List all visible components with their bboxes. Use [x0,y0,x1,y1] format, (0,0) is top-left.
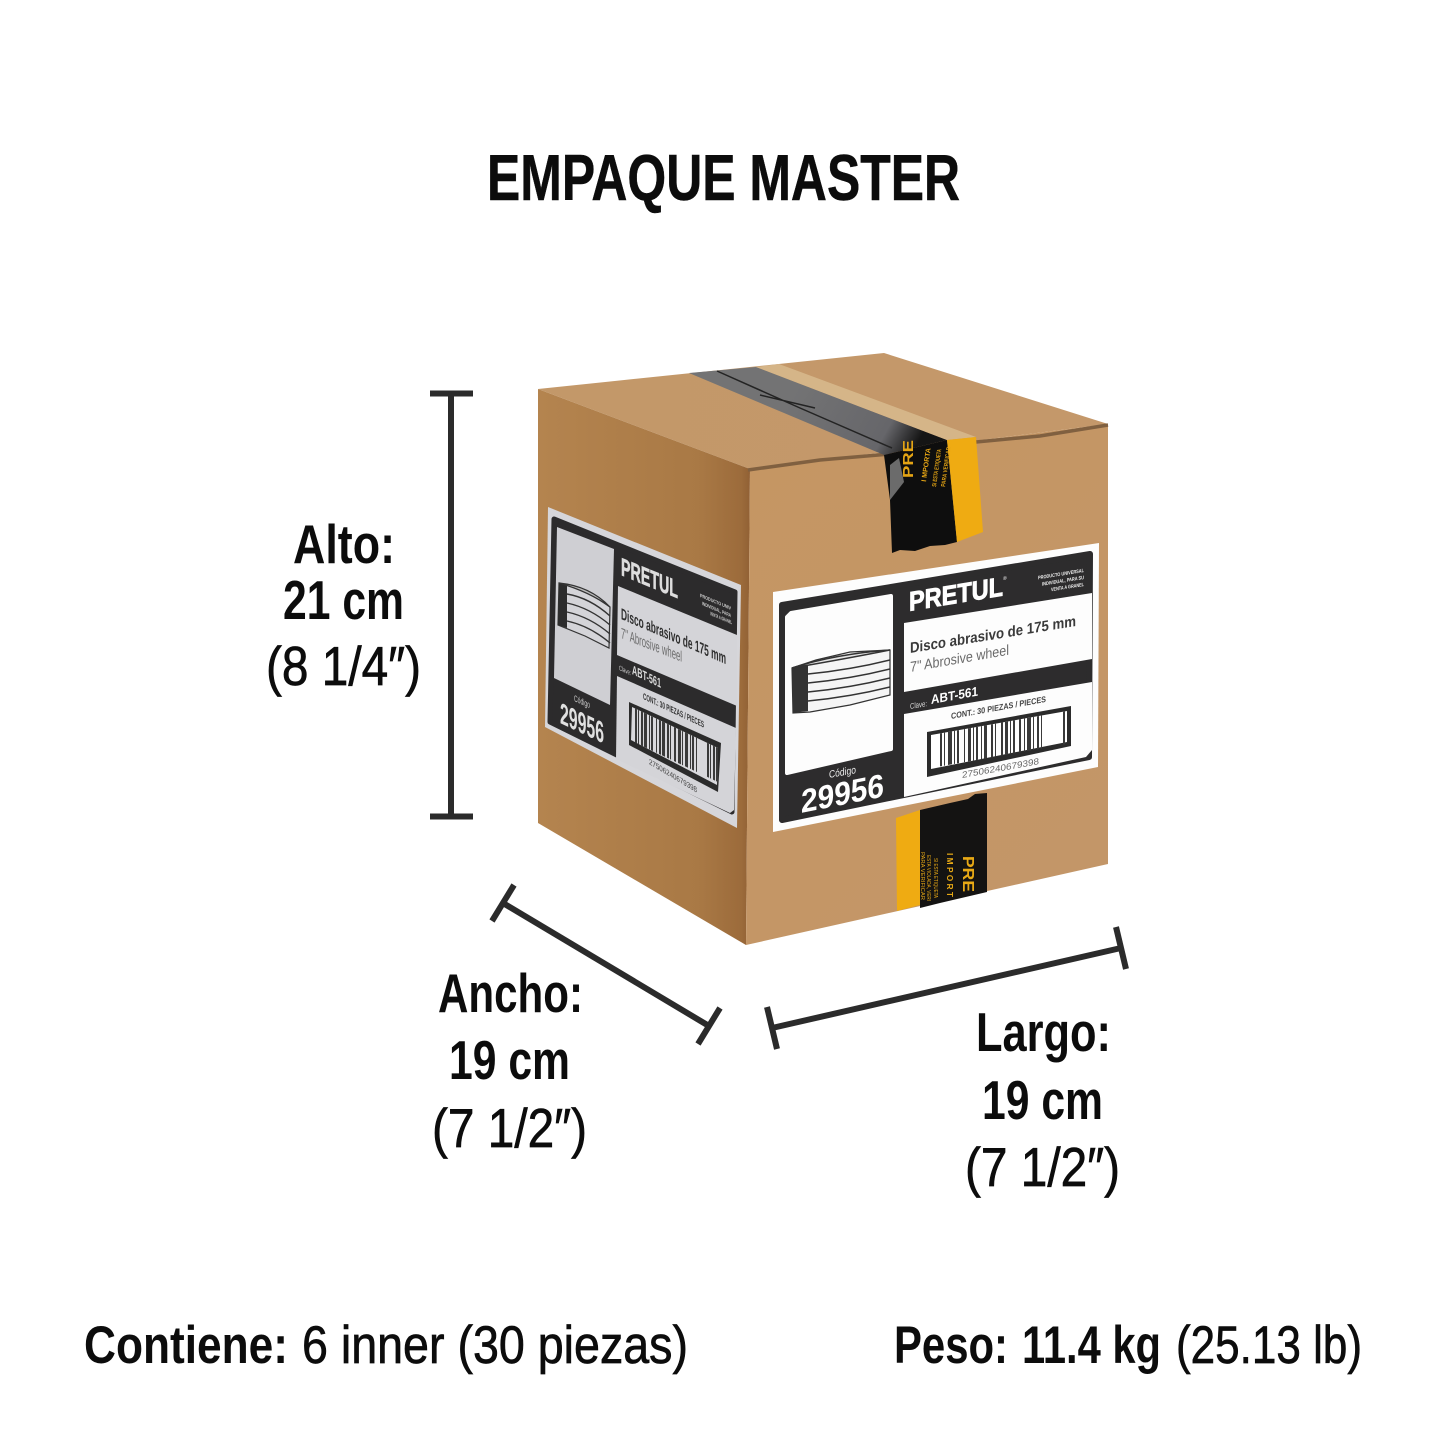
length label: (7 1/2″) [965,1136,1120,1198]
height label: 21 cm [283,569,404,631]
side barcode [629,702,721,792]
side name panel [617,586,737,706]
height label [266,513,421,697]
side product label: 7" Abrosive wheel [621,625,682,666]
side small note [700,593,732,626]
side product label [545,507,741,828]
contents note: 6 inner (30 piezas) [302,1316,688,1375]
front product label: 29956 [801,768,884,821]
packing tape on bottom [896,793,987,911]
side product label: ABT-561 [632,663,661,691]
side small note: INDIVIDUAL, PARA [702,601,731,619]
width dimension line [492,885,720,1044]
width label: 19 cm [449,1029,570,1091]
packing tape on top [689,364,983,553]
packing tape on bottom: PRE [959,856,976,892]
width label [432,962,587,1159]
contents: CONT.: 30 PIEZAS / PIECES [951,694,1046,721]
front product label [773,543,1099,832]
box left face [538,389,750,945]
product name: Disco abrasivo de 175 mm [910,613,1076,657]
packing tape on bottom: PARA VERIFICAR [919,852,925,900]
tape lettering [900,440,953,487]
front product label: 27506240679398 [962,756,1039,780]
abrasive disc icon [792,650,890,713]
side product label: 27506240679398 [649,757,697,795]
packing tape on bottom: I M P O R T [945,853,954,897]
height label: Alto: [293,513,395,575]
contents note [84,1316,688,1375]
side small note: PRODUCTO UNIV [700,593,731,612]
flap seam [748,425,1108,470]
height label: (8 1/4″) [266,635,421,697]
weight note: Peso: [894,1316,1008,1375]
clave: Clave: [910,699,927,711]
weight note: (25.13 lb) [1176,1316,1362,1375]
brand: PRETUL [909,571,1003,617]
side small note: VENTA A GRANEL [710,611,732,626]
code panel [904,682,1092,797]
side clave: Clave: [619,663,631,677]
side product code: Código [574,693,590,711]
box top face [538,353,1108,469]
front product label: ABT-561 [931,684,978,707]
barcode [927,706,1071,777]
side contents: CONT.: 30 PIEZAS / PIECES [643,691,704,731]
tape lettering: SI ESTA ETIQUETA [932,448,943,487]
front product label: 7" Abrosive wheel [910,643,1009,676]
title: EMPAQUE MASTER [487,141,960,214]
height dimension line [430,393,473,817]
weight note [894,1316,1362,1375]
tape lettering: I MPORTA [921,448,933,482]
side product name: Disco abrasivo de 175 mm [621,605,726,668]
tape lettering: PARA VERIFICAR [941,446,953,487]
small note: INDIVIDUAL, PARA SU [1042,575,1084,588]
side image panel [554,527,614,705]
length dimension line [767,927,1126,1049]
packing tape on bottom: SI ESTA ETIQUETA [932,858,938,898]
side disc icon [558,583,610,648]
front product label: ® [1003,574,1007,582]
side product label: 29956 [560,695,604,750]
small note: PRODUCTO UNIVERSAL [1038,568,1084,581]
width label: Ancho: [438,962,583,1024]
product image panel [787,596,891,773]
small note [1038,568,1084,593]
tape lettering: PRE [900,440,917,478]
weight note: 11.4 kg [1022,1316,1161,1375]
packing tape on bottom: ESTA VIOLADA, VERI [925,855,931,901]
small note: VENTA A GRANEL [1051,582,1084,593]
width label: (7 1/2″) [432,1097,587,1159]
product name panel [904,593,1092,692]
contents note: Contiene: [84,1316,288,1375]
side brand: PRETUL [621,552,678,604]
cardboard box photo [538,353,1108,945]
product code: Código [829,764,856,781]
length label: 19 cm [982,1069,1103,1131]
length label: Largo: [976,1001,1111,1063]
length label [965,1001,1120,1198]
side code panel [616,676,736,813]
box front face [746,424,1108,945]
